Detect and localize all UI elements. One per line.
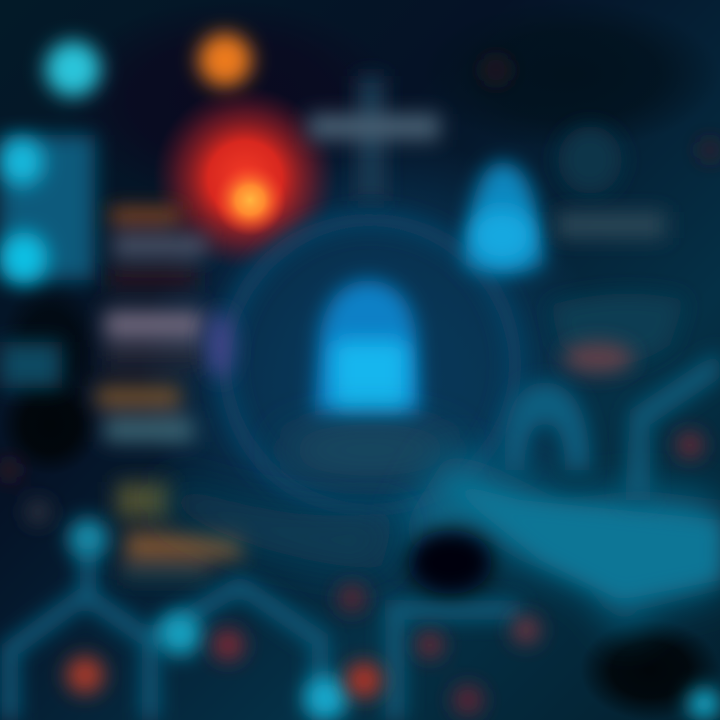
heading: top centre blurred label — [308, 76, 440, 201]
icon: red alert glow — [153, 86, 337, 270]
network: lower left hexagon circuits — [10, 540, 320, 720]
node: cyan lower left nodes — [68, 518, 720, 720]
icon: central padlock — [280, 280, 460, 476]
accent: violet glow beside ring — [206, 311, 234, 379]
text block: left blurred labels — [96, 208, 207, 442]
icon: left column nodes — [0, 138, 48, 284]
panel: left column tiles — [0, 135, 95, 388]
network: mid-left connecting band — [170, 480, 400, 570]
network: lower right bright circuit mass — [385, 350, 720, 720]
chart: central ring — [225, 220, 515, 510]
icon: cyan dot — [45, 41, 101, 97]
icon: orange dot — [198, 33, 252, 87]
node: dark notch in circuit — [408, 530, 492, 594]
icon: far right shield and label — [550, 126, 685, 374]
icon: upper right padlock — [464, 162, 544, 274]
text block: lower left orange label — [116, 482, 243, 579]
